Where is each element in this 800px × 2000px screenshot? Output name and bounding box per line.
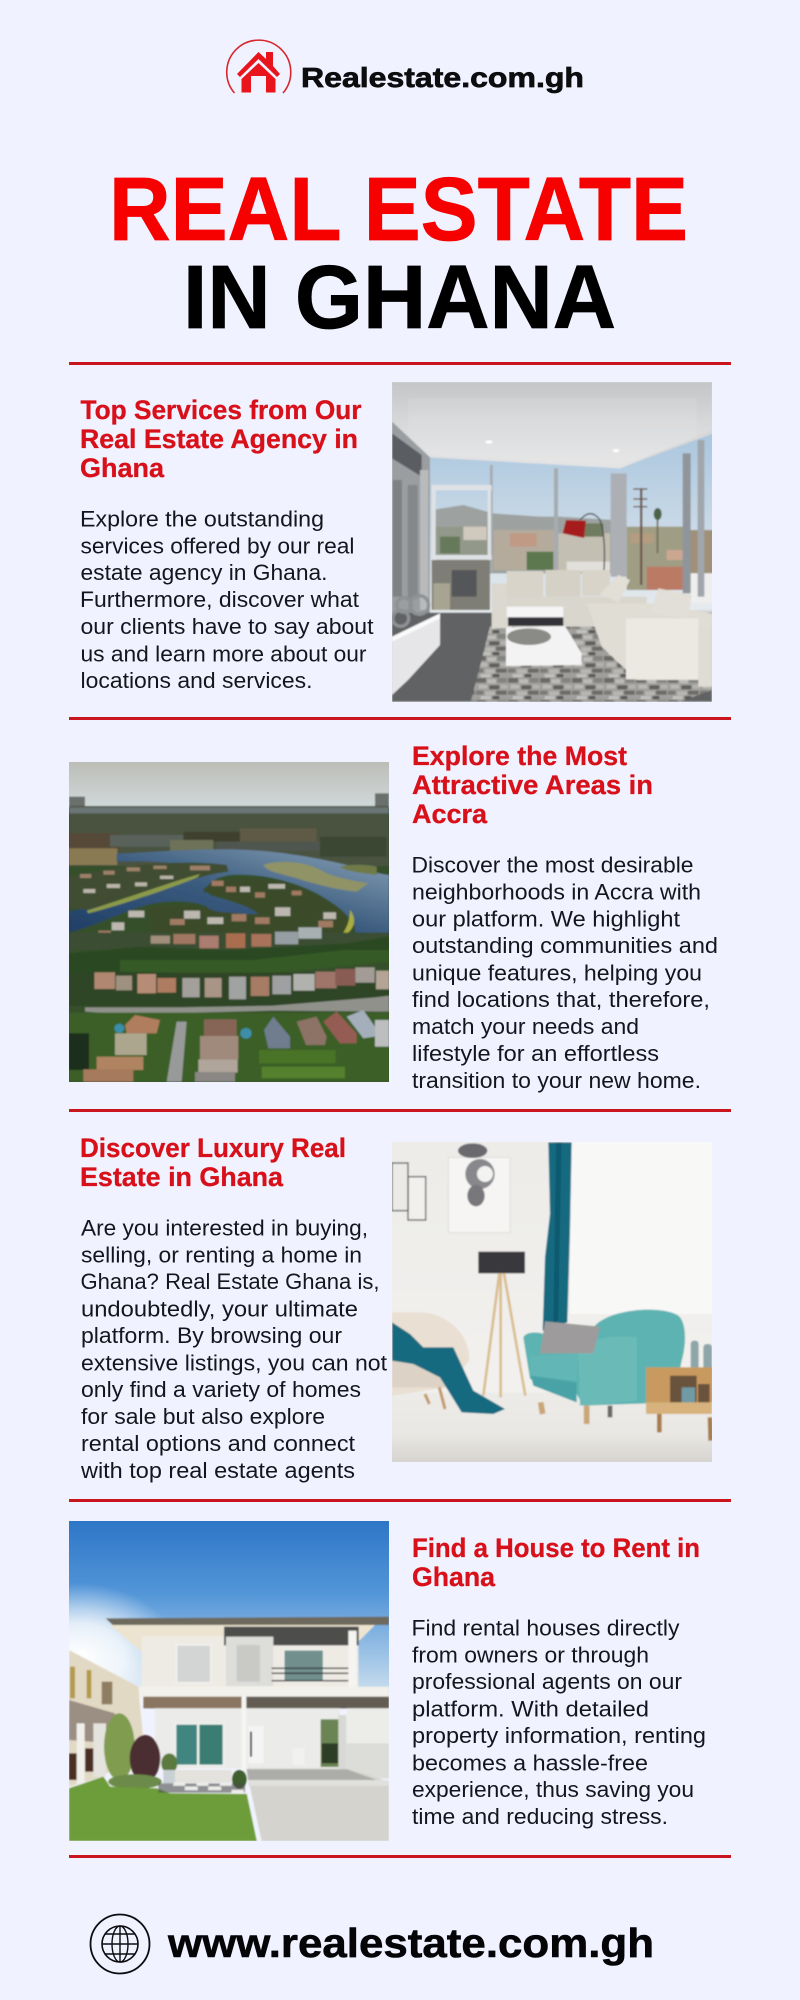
wooden side table [646,1367,713,1441]
lower lawns and houses [69,1013,389,1082]
island [263,862,368,892]
body text: house to rent: property information, renting [412,1723,706,1748]
body text: top services: Furthermore, discover what [80,587,359,612]
heading: luxury real estate [80,1133,346,1192]
peninsula with houses [147,878,355,940]
roof [106,1617,389,1626]
photo: living room with teal armchair [392,1142,712,1462]
website url: www.realestate.com.gh [167,1920,654,1966]
white sectional sofa [492,570,712,687]
section 3: luxury real estate [80,1131,727,1483]
section 1: top services [80,370,727,717]
body text: house to rent: time and reducing stress. [412,1804,668,1829]
cream armchair [392,1312,469,1409]
title line 1: REAL ESTATE [109,160,688,260]
floor lamp [478,1252,525,1397]
body text: house to rent: platform. With detailed [412,1696,649,1722]
lawn [69,1777,257,1841]
body text: luxury real estate [80,1216,387,1483]
title [109,160,688,348]
teal armchair [523,1310,685,1424]
heading: house to rent [412,1533,700,1592]
heading: attractive areas [412,741,653,829]
footer [90,1914,654,1974]
body text: attractive areas: match your needs and [412,1014,639,1039]
wall art [448,1143,510,1233]
red floor lamp [563,514,604,570]
coffee table [506,607,582,666]
slab and band [132,1687,389,1697]
hedge band [69,937,389,980]
heading: luxury real estate: Estate in Ghana [80,1162,283,1192]
photo: two-storey white house [69,1521,389,1841]
body text: house to rent: from owners or through [412,1642,649,1668]
teal curtain [543,1142,572,1331]
body text: top services: our clients have to say about [80,614,374,639]
body text: luxury real estate: for sale but also explore [81,1404,325,1429]
driveway [247,1768,389,1841]
logo icon: house in circle [227,40,291,93]
body text: attractive areas: outstanding communities and [412,933,718,958]
body text: attractive areas: find locations that, therefore, [412,987,710,1012]
shrubs [104,1713,247,1789]
body text: attractive areas: unique features, helping you [412,960,702,986]
heading: top services: Ghana [80,453,164,483]
heading: top services: Top Services from Our [80,395,362,425]
lake [69,849,389,937]
photo: aerial view of waterfront neighborhood [69,762,389,1082]
body text: house to rent: professional agents on our [412,1669,682,1694]
body text: attractive areas: our platform. We highlight [412,906,680,932]
body text: luxury real estate: Ghana? Real Estate Ghana is, [80,1269,380,1294]
body text: luxury real estate: with top real estate agents [80,1458,355,1483]
heading: top services: Real Estate Agency in [80,424,358,454]
heading: attractive areas: Attractive Areas in [412,770,653,800]
body text: house to rent [412,1616,706,1829]
teal blanket [392,1322,505,1414]
body text: house to rent: becomes a hassle-free [412,1750,648,1776]
body text: luxury real estate: selling, or renting a home in [81,1242,362,1268]
section 4: house to rent [0,1510,706,1841]
heading: top services [80,395,362,483]
body text: attractive areas: neighborhoods in Accra with [412,880,701,904]
logo wordmark: Realestate.com.gh [301,62,584,93]
neighbouring house [69,1650,143,1787]
body text: top services [80,506,374,693]
body text: top services: services offered by our real [80,534,354,558]
street [85,996,389,1019]
body text: top services: estate agency in Ghana. [80,560,328,585]
icon: globe [90,1914,150,1974]
body text: luxury real estate: only find a variety of homes [81,1377,361,1402]
title line 2: IN GHANA [183,248,616,348]
body text: luxury real estate: platform. By browsing our [81,1323,342,1348]
heading: attractive areas: Explore the Most [412,741,627,771]
house row lower [69,973,389,1006]
body text: luxury real estate: extensive listings, you can not [81,1350,387,1376]
body text: attractive areas: transition to your new home. [412,1068,701,1093]
upper storey [142,1636,358,1688]
lower storey [155,1708,340,1768]
heading: attractive areas: Accra [412,799,487,829]
photo: modern living room with city view [392,382,712,702]
body text: attractive areas: Discover the most desirable [412,852,694,878]
body text: top services: locations and services. [80,668,312,693]
body text: luxury real estate: rental options and connect [81,1431,355,1456]
body text: luxury real estate: Are you interested in buying, [81,1216,368,1240]
body text: top services: Explore the outstanding [80,506,324,532]
heading: luxury real estate: Discover Luxury Real [80,1133,346,1163]
body text: house to rent: experience, thus saving you [412,1777,694,1802]
body text: top services: us and learn more about our [80,642,366,666]
logo [227,40,584,93]
section 2: attractive areas [60,741,718,1093]
body text: attractive areas [412,852,718,1093]
heading: house to rent: Ghana [412,1562,495,1592]
waterfront houses left [69,863,228,910]
vases [691,1341,712,1376]
body text: luxury real estate: undoubtedly, your ultimate [81,1296,358,1322]
body text: house to rent: Find rental houses directly [412,1616,680,1640]
heading: house to rent: Find a House to Rent in [412,1533,700,1563]
body text: attractive areas: lifestyle for an effortless [412,1041,659,1066]
house row middle [69,933,389,950]
